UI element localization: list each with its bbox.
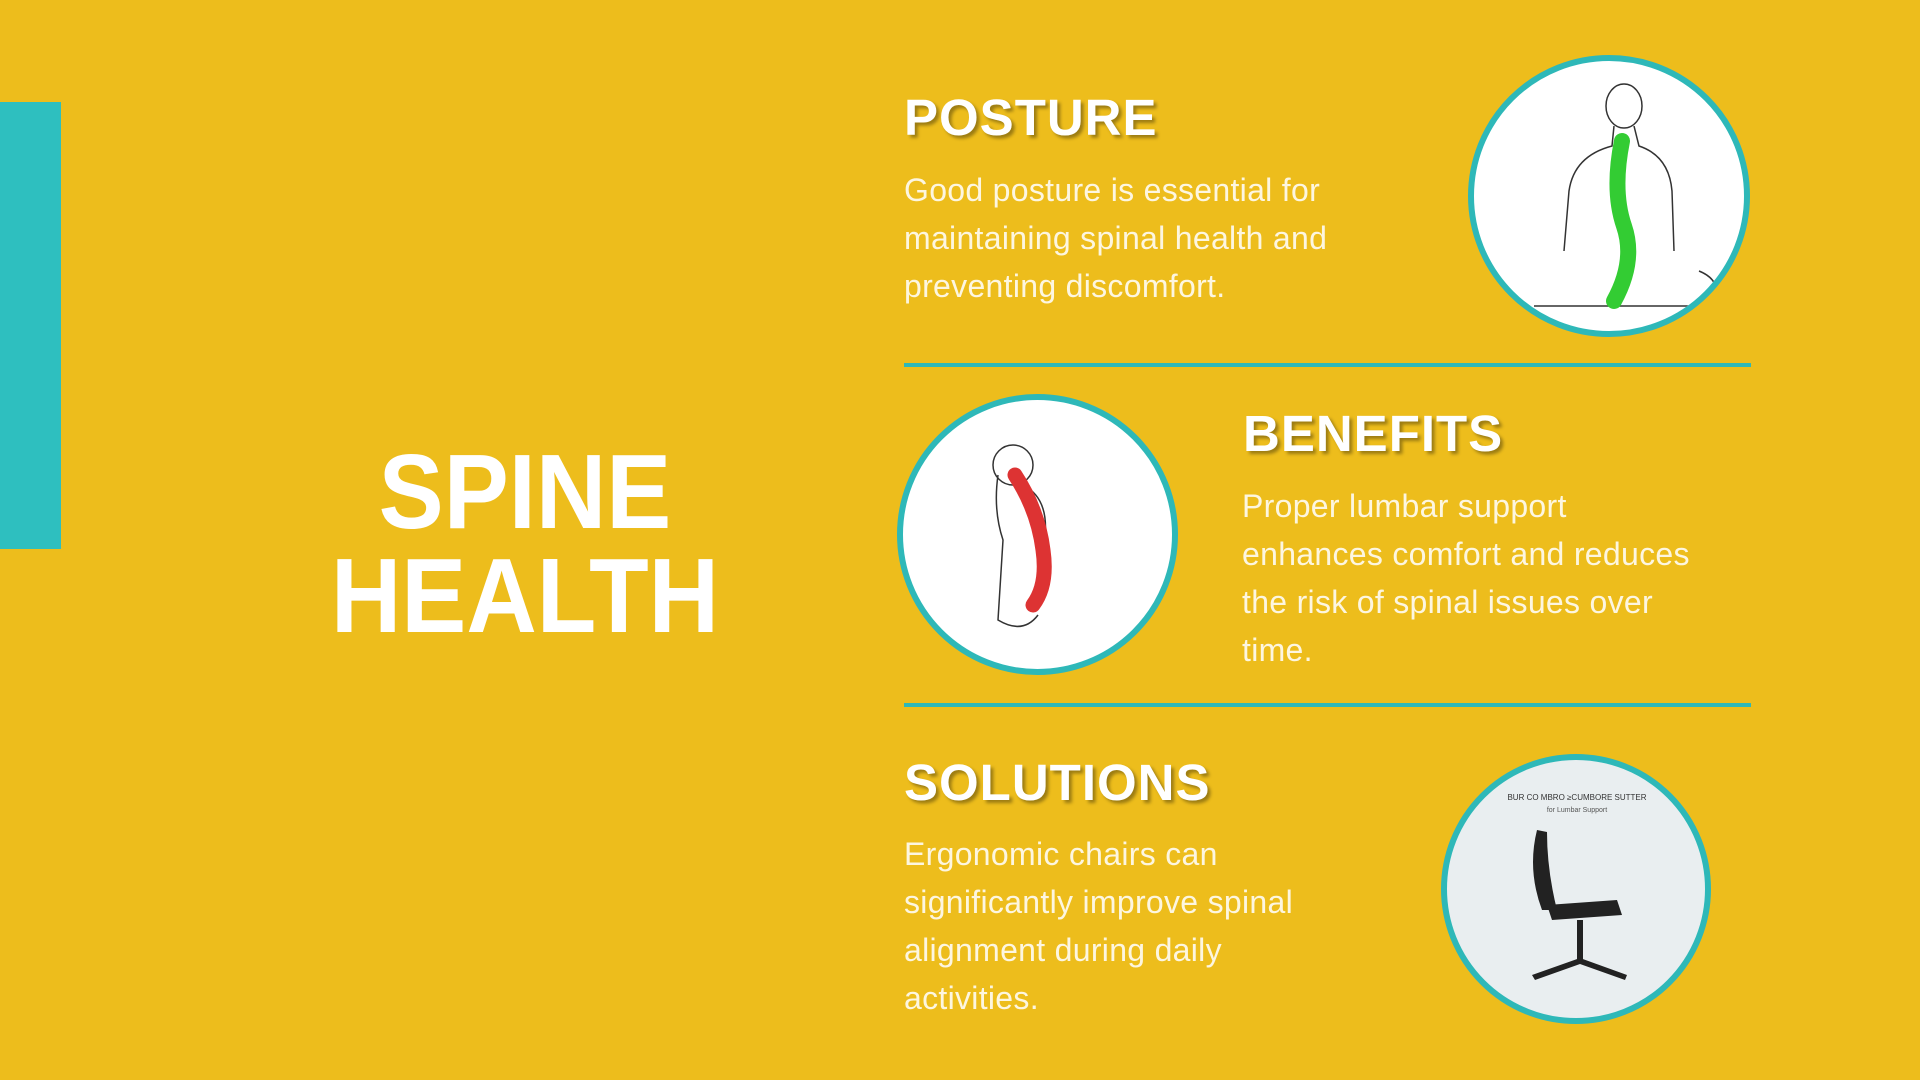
title: HEALTH	[331, 537, 719, 655]
heading: benefits: BENEFITS	[1243, 405, 1503, 462]
divider	[904, 363, 1751, 367]
title: SPINE	[379, 433, 671, 551]
icon: ergonomic chair: for Lumbar Support	[1547, 807, 1607, 814]
title	[331, 433, 719, 655]
text: posture: Good posture is essential for maintaining spinal health and preventing discomfort.	[904, 172, 1327, 304]
icon: ergonomic chair: BUR CO MBRO ≥CUMBORE SUTTER	[1507, 793, 1647, 802]
text: benefits: Proper lumbar support enhances comfort and reduces the risk of spinal issues over time.	[1242, 488, 1690, 668]
teal accent bar	[0, 102, 61, 549]
icon: posture spine	[1468, 55, 1750, 337]
heading: solutions: SOLUTIONS	[904, 754, 1211, 811]
divider	[904, 703, 1751, 707]
text: solutions: Ergonomic chairs can significantly improve spinal alignment during daily activities.	[904, 836, 1293, 1016]
icon: benefits spine	[897, 394, 1178, 675]
heading: posture: POSTURE	[904, 89, 1158, 146]
icon: ergonomic chair	[1441, 754, 1711, 1024]
